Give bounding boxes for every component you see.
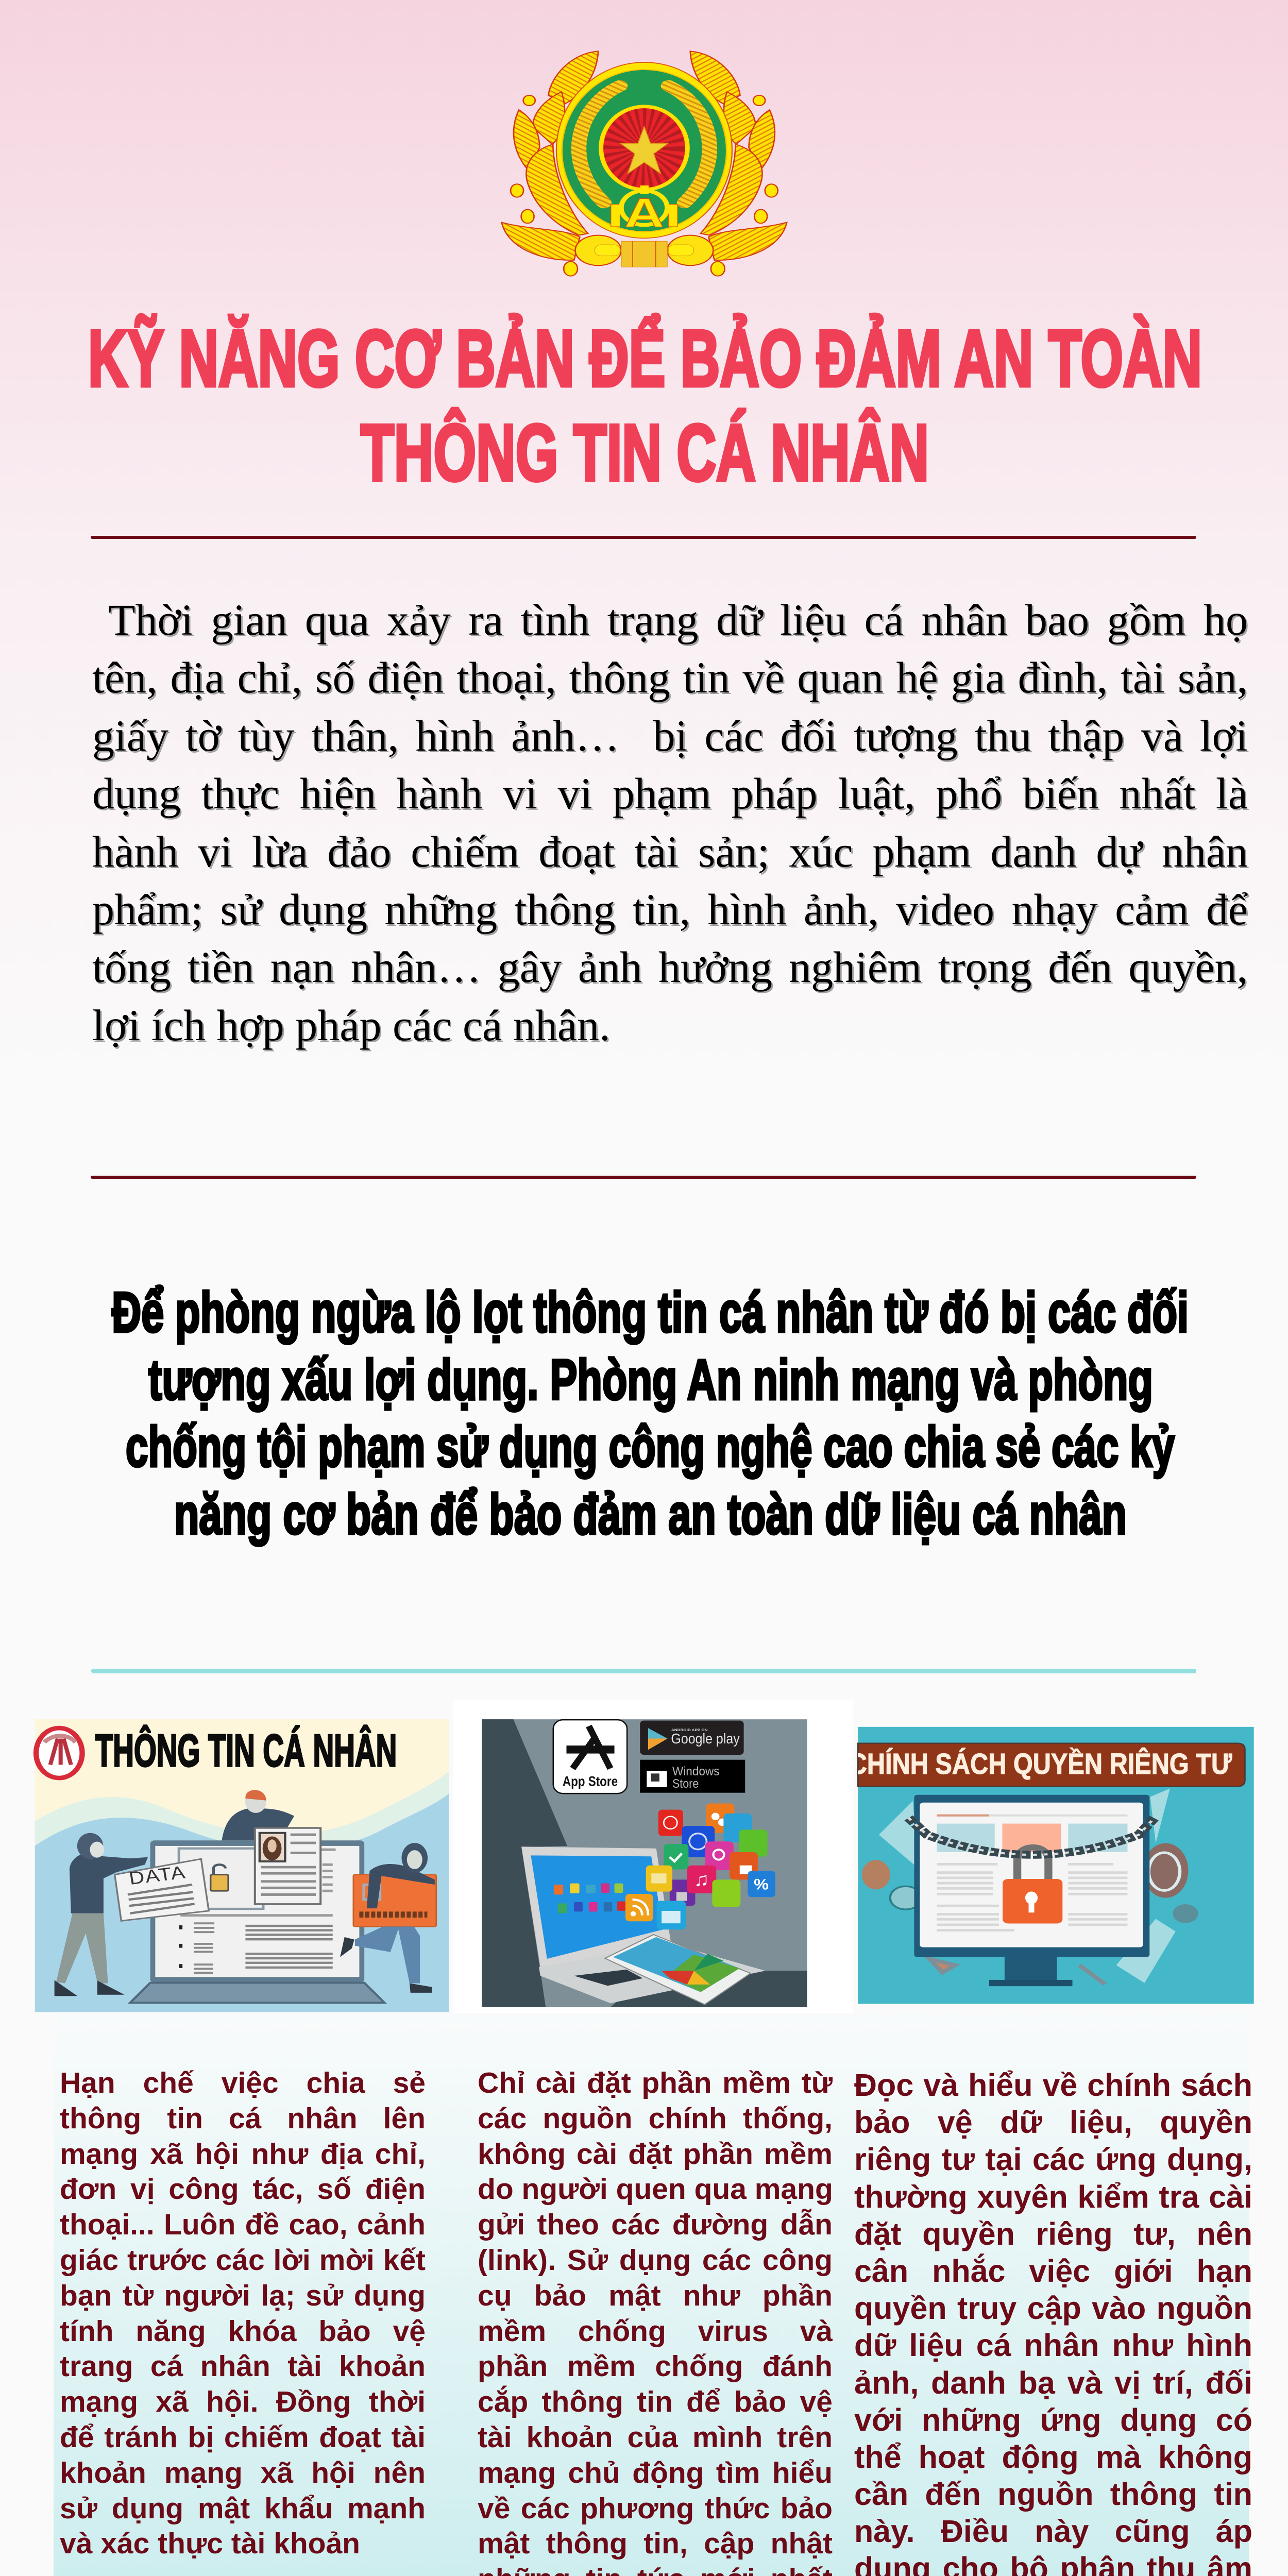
picture: official app stores and devices: App Store — [563, 1773, 618, 1789]
text column 2: install software from official sources: cụ bảo mật như phần — [478, 2279, 833, 2312]
panel: teal gradient behind the three columns — [54, 2012, 1249, 2576]
picture: official app stores and devices — [482, 1719, 807, 2007]
text column 2: install software from official sources: mềm chống virus và — [478, 2315, 833, 2348]
picture: personal information theft — [35, 1719, 449, 2012]
text column 1: limit sharing personal info: khoản mạng xã hội nên — [60, 2456, 426, 2489]
intro paragraph — [92, 595, 1249, 1051]
text column 3: read privacy policies: đặt quyền riêng tư, nên — [854, 2216, 1252, 2251]
intro paragraph: phẩm; sử dụng những thông tin, hình ảnh, video nhạy cảm để — [92, 885, 1248, 934]
text column 1: limit sharing personal info: Hạn chế việc chia sẻ — [60, 2066, 426, 2099]
text column 1: limit sharing personal info: giác trước các lời mời kết — [60, 2244, 426, 2277]
intro paragraph: tống tiền nạn nhân… gây ảnh hưởng nghiêm trọng đến quyền, — [92, 942, 1248, 992]
intro paragraph: hành vi lừa đảo chiếm đoạt tài sản; xúc phạm danh dự nhân — [92, 827, 1248, 876]
text column 1: limit sharing personal info: bạn từ người lạ; sử dụng — [60, 2279, 426, 2312]
intro paragraph: lợi ích hợp pháp các cá nhân. — [92, 1001, 611, 1050]
text column 2: install software from official sources: về các phương thức bảo — [478, 2492, 833, 2525]
text column 2: install software from official sources: (link). Sử dụng các công — [478, 2244, 833, 2277]
text column 2: install software from official sources: gửi theo các đường dẫn — [478, 2208, 833, 2241]
intro paragraph: tên, địa chỉ, số điện thoại, thông tin về quan hệ gia đình, tài sản, — [92, 653, 1248, 702]
picture: privacy policy monitor with chain and lock — [849, 1727, 1254, 2004]
lead heading — [112, 1281, 1189, 1546]
text column 1: limit sharing personal info: để tránh bị chiếm đoạt tài — [60, 2421, 426, 2454]
text column 1: limit sharing personal info: đơn vị công tác, số điện — [60, 2173, 426, 2206]
intro paragraph: Thời gian qua xảy ra tình trạng dữ liệu cá nhân bao gồm họ — [108, 595, 1248, 645]
text column 2: install software from official sources: các nguồn chính thống, — [478, 2102, 833, 2135]
text column 1: limit sharing personal info — [60, 2066, 426, 2560]
picture: official app stores and devices: ♫ — [694, 1869, 709, 1890]
picture: personal information theft: DATA — [127, 1862, 187, 1889]
picture: official app stores and devices: Store — [672, 1777, 699, 1791]
picture: official app stores and devices: Windows — [672, 1765, 720, 1778]
picture: personal information theft: THÔNG TIN CÁ NHÂN — [95, 1725, 397, 1776]
text column 3: read privacy policies: quyền truy cập vào nguồn — [854, 2291, 1252, 2326]
text column 2: install software from official sources: tài khoản của mình trên — [478, 2421, 833, 2454]
text column 3: read privacy policies: riêng tư tại các ứng dụng, — [854, 2142, 1252, 2177]
picture: official app stores and devices: % — [754, 1876, 769, 1893]
text column 1: limit sharing personal info: sử dụng mật khẩu mạnh — [60, 2492, 426, 2525]
text column 2: install software from official sources: mạng chủ động tìm hiểu — [478, 2456, 833, 2489]
text column 3: read privacy policies: dữ liệu cá nhân như hình — [854, 2328, 1252, 2363]
picture: official app stores and devices: Google play — [671, 1731, 740, 1747]
intro paragraph: giấy tờ tùy thân, hình ảnh… bị các đối tượng thu thập và lợi — [92, 711, 1248, 760]
text column 2: install software from official sources: cắp thông tin để bảo vệ — [478, 2385, 833, 2418]
text column 3: read privacy policies: với những ứng dụng có — [854, 2402, 1252, 2437]
text column 2: install software from official sources: Chỉ cài đặt phần mềm từ — [478, 2066, 833, 2099]
text column 3: read privacy policies: ảnh, danh bạ và vị trí, đối — [854, 2365, 1252, 2400]
text column 1: limit sharing personal info: và xác thực tài khoản — [60, 2527, 360, 2560]
text column 1: limit sharing personal info: mạng xã hội như địa chỉ, — [60, 2138, 426, 2171]
text column 3: read privacy policies: Đọc và hiểu về chính sách — [854, 2067, 1252, 2103]
text column 3: read privacy policies — [854, 2067, 1252, 2576]
icon: police emblem with laurel wreath — [502, 51, 787, 276]
text column 3: read privacy policies: cần đến nguồn thông tin — [854, 2477, 1252, 2512]
picture: official app stores and devices: ANDROID APP ON — [671, 1728, 708, 1732]
title: THÔNG TIN CÁ NHÂN — [361, 408, 929, 497]
text column 2: install software from official sources — [478, 2066, 833, 2576]
text column 1: limit sharing personal info: trang cá nhân tài khoản — [60, 2350, 426, 2383]
text column 2: install software from official sources: do người quen qua mạng — [478, 2173, 833, 2206]
text column 2: install software from official sources: không cài đặt phần mềm — [478, 2138, 833, 2171]
text column 3: read privacy policies: thể hoạt động mà không — [854, 2439, 1252, 2475]
text column 3: read privacy policies: này. Điều này cũng áp — [854, 2514, 1252, 2549]
white card behind the second picture — [453, 1700, 853, 2013]
text column 3: read privacy policies: thường xuyên kiểm tra cài — [854, 2179, 1252, 2214]
text column 1: limit sharing personal info: thoại... Luôn đề cao, cảnh — [60, 2208, 426, 2241]
title — [88, 314, 1202, 497]
text column 1: limit sharing personal info: mạng xã hội. Đồng thời — [60, 2385, 426, 2418]
text column 3: read privacy policies: bảo vệ dữ liệu, quyền — [854, 2105, 1252, 2140]
text column 2: install software from official sources: phần mềm chống đánh — [478, 2350, 833, 2383]
text column 3: read privacy policies: cân nhắc việc giới hạn — [854, 2253, 1252, 2289]
intro paragraph: dụng thực hiện hành vi vi phạm pháp luật, phổ biến nhất là — [92, 769, 1248, 818]
text column 1: limit sharing personal info: thông tin cá nhân lên — [60, 2102, 426, 2135]
icon: police emblem with laurel wreath: A — [624, 190, 664, 236]
text column 1: limit sharing personal info: tính năng khóa bảo vệ — [60, 2315, 426, 2348]
text column 2: install software from official sources: mật thông tin, cập nhật — [478, 2527, 833, 2560]
